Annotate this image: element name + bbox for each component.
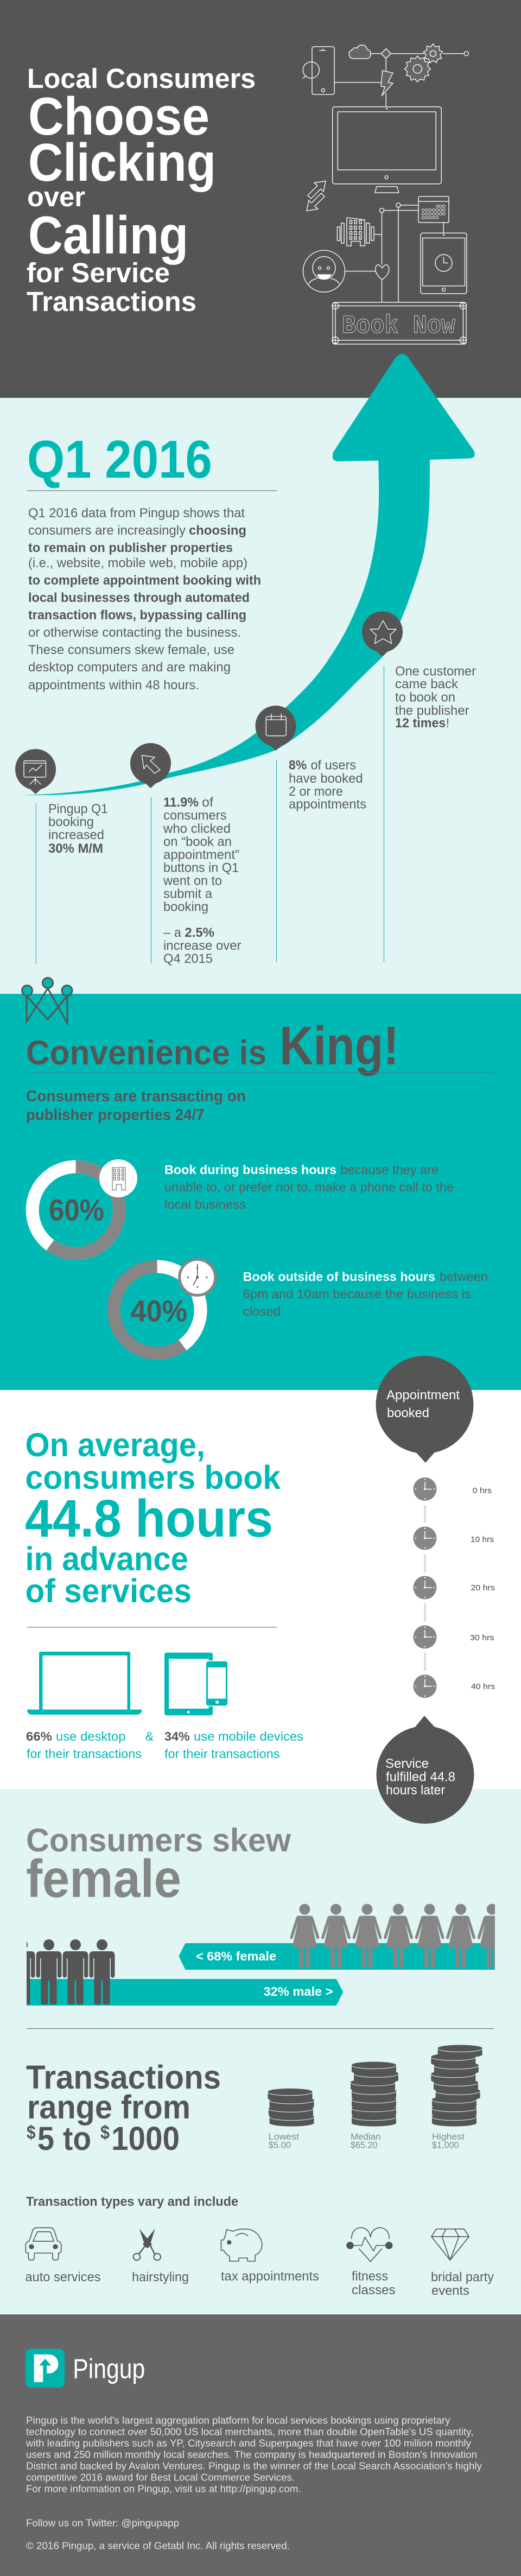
title: Local Consumers xyxy=(27,63,256,94)
chart: highest coin stack: $1,000 xyxy=(432,2140,459,2150)
stat: 11.9% of consumers: appointment” xyxy=(163,848,239,862)
stat: 8% of users: of users xyxy=(310,758,356,773)
chart: median coin stack: Median xyxy=(351,2131,381,2142)
stat: 11.9% of consumers: 11.9% xyxy=(163,795,199,810)
chart: 32% male bar: 32% male > xyxy=(264,1984,333,1998)
icon: smiling face xyxy=(303,250,376,292)
text block: book during business hours: local business xyxy=(164,1197,246,1211)
icon: scissors xyxy=(134,2229,161,2260)
chart: 60% donut xyxy=(33,1159,137,1254)
timeline: hours: 10 hrs xyxy=(471,1535,494,1544)
stat: 11.9% of consumers: went on to xyxy=(163,874,222,889)
label: bridal party events xyxy=(431,2270,494,2298)
marker: chart pin xyxy=(15,749,56,794)
text block: book during business hours: unable to, or prefer not to, make a phone call to the xyxy=(164,1180,454,1194)
stat: one customer 12 times: ! xyxy=(446,716,449,731)
marker: cursor pin xyxy=(130,743,171,788)
icon: piggy bank xyxy=(221,2229,262,2261)
chart: median coin stack xyxy=(351,2062,398,2150)
heading: transactions range: 1000 xyxy=(111,2120,180,2157)
text block: about Pingup: For more information on Pingup, visit us at http://pingup.com. xyxy=(26,2483,301,2494)
stat: one customer 12 times: came back xyxy=(395,677,459,691)
icon: cloud, diamond, gears xyxy=(349,42,468,82)
heading: on average 44.8 hours xyxy=(25,1426,281,1609)
stat: 11.9% of consumers: on “book an xyxy=(163,835,232,849)
text block: book during business hours: Book during business hours xyxy=(164,1163,336,1177)
timeline: hours: 0 hrs xyxy=(473,1486,492,1495)
heading: Convenience is King!: King! xyxy=(279,1016,399,1076)
timeline: hours xyxy=(414,1477,495,1698)
text block: about Pingup: with leading publishers such as YP, Citysearch and Superpages that have over 100 million monthly xyxy=(26,2438,471,2449)
text: ampersand: & xyxy=(145,1729,154,1743)
icon: laptop xyxy=(27,1652,142,1715)
icon: phone with magnifier xyxy=(303,47,381,94)
stat: one customer 12 times: the publisher xyxy=(395,703,469,718)
text block: Q1 intro paragraph: to remain on publisher properties xyxy=(28,541,233,555)
title: Calling xyxy=(28,205,188,265)
heading: consumers skew female xyxy=(26,1822,291,1908)
stat: 8% of users: 8% xyxy=(289,758,307,773)
title: Choose xyxy=(28,86,209,146)
icon: connector lines and calendar xyxy=(374,196,449,302)
heading: on average 44.8 hours: consumers book xyxy=(25,1459,281,1496)
heading: transactions range: to xyxy=(63,2120,91,2157)
stat: bookings increased: booking xyxy=(48,815,94,829)
title: over xyxy=(27,181,85,212)
text block: about Pingup: Pingup is the world's largest aggregation platform for local services bookings using proprietary xyxy=(26,2415,450,2426)
icon: diamond xyxy=(431,2229,469,2260)
panel: light demographics background xyxy=(0,1789,521,2314)
stat: 34% mobile: use mobile devices xyxy=(194,1729,303,1743)
label: auto services: auto services xyxy=(25,2270,101,2285)
heading: transactions range: $ xyxy=(100,2122,110,2143)
stat: 66% desktop xyxy=(26,1729,142,1761)
icon: office building xyxy=(337,218,374,246)
timeline: hours: 40 hrs xyxy=(471,1682,495,1691)
label: hairstyling: hairstyling xyxy=(132,2270,189,2285)
subheading: transaction types: Transaction types vary and include xyxy=(26,2194,238,2209)
text block: book outside business hours xyxy=(219,1270,488,1318)
icon: clock badge xyxy=(180,1259,215,1295)
panel: white booking-lead background xyxy=(0,1390,521,1789)
stat: one customer 12 times: One customer xyxy=(395,664,476,678)
text block: Q1 intro paragraph: local businesses through automated xyxy=(28,591,250,605)
text block: Q1 intro paragraph: consumers are increasingly xyxy=(28,523,186,538)
timeline: hours: 20 hrs xyxy=(471,1583,495,1592)
stat: bookings increased xyxy=(36,802,108,964)
stat: 34% mobile: 34% xyxy=(164,1729,190,1743)
stat: 8% of users: appointments xyxy=(289,797,366,812)
stat: 8% of users xyxy=(276,758,366,962)
label: fitness classes: fitness xyxy=(352,2269,388,2284)
label: bridal party events: bridal party xyxy=(431,2270,494,2285)
text block: book outside business hours: between xyxy=(440,1270,488,1284)
icon: lightning bolt xyxy=(381,59,393,106)
stat: 8% of users: have booked xyxy=(289,771,363,786)
heading: transactions range: Transactions xyxy=(26,2059,221,2096)
text block: Q1 intro paragraph: These consumers skew female, use xyxy=(28,643,234,657)
panel: footer background xyxy=(0,2314,521,2576)
icon: desktop monitor xyxy=(333,107,441,193)
icon: crown xyxy=(22,978,72,1023)
panel: dark header background xyxy=(0,0,521,398)
heading: on average 44.8 hours: On average, xyxy=(25,1426,205,1463)
stat: 11.9% of consumers: of xyxy=(202,795,213,810)
chart: 40% donut xyxy=(114,1259,215,1354)
heading: on average 44.8 hours: in advance xyxy=(25,1540,188,1577)
heading: on average 44.8 hours: of services xyxy=(25,1572,192,1609)
chart: 60% donut: 60% xyxy=(49,1193,104,1227)
text block: Q1 intro paragraph: Q1 2016 data from Pingup shows that xyxy=(28,506,245,521)
icon: tablet and phone xyxy=(164,1653,228,1715)
heading: Convenience is King!: Convenience is xyxy=(26,1034,266,1072)
text block: Q1 intro paragraph: to complete appointment booking with xyxy=(28,573,261,588)
icon: heart with pulse xyxy=(347,2228,392,2262)
stat: 11.9% of consumers xyxy=(151,795,241,966)
text block: about Pingup: users and 250 million monthly local searches. The company is headquartered in Boston's Innovation xyxy=(26,2449,477,2460)
callout: appointment booked: booked xyxy=(387,1406,429,1420)
stat: 34% mobile xyxy=(164,1729,303,1761)
logo: Pingup xyxy=(26,2349,145,2388)
icon: tablet with clock xyxy=(421,233,467,294)
chart: 40% donut: 40% xyxy=(131,1294,187,1328)
text block: Q1 intro paragraph: or otherwise contacting the business. xyxy=(28,625,241,640)
icon: sync arrows xyxy=(307,181,326,211)
heading: transactions range xyxy=(26,2059,221,2157)
stat: 11.9% of consumers: submit a xyxy=(163,887,213,902)
subheading: transacting 24/7 xyxy=(26,1088,246,1124)
chart: 68% female bar: < 68% female xyxy=(196,1949,276,1963)
chart: 68% female bar xyxy=(179,1904,506,1970)
stat: one customer 12 times: to book on xyxy=(395,690,455,705)
subheading: transacting 24/7: Consumers are transacting on xyxy=(26,1088,246,1105)
text block: book outside business hours: closed xyxy=(243,1304,281,1318)
icon: heart xyxy=(376,265,389,280)
heading: on average 44.8 hours: 44.8 hours xyxy=(25,1489,273,1548)
text block: book during business hours xyxy=(140,1163,454,1211)
callout: service fulfilled xyxy=(377,1716,474,1824)
text block: Q1 intro paragraph: desktop computers and are making xyxy=(28,660,231,675)
stat: 11.9% of consumers: consumers xyxy=(163,808,227,823)
timeline: hours: 30 hrs xyxy=(470,1633,494,1642)
heading: transactions range: range from xyxy=(27,2089,190,2125)
heading: transactions range: 5 xyxy=(37,2120,54,2157)
chart: lowest coin stack xyxy=(268,2089,314,2150)
text block: book outside business hours: Book outside of business hours xyxy=(243,1270,435,1284)
text block: Q1 intro paragraph: choosing xyxy=(189,523,246,538)
heading: Convenience is King! xyxy=(26,1016,399,1076)
stat: 11.9% of consumers: buttons in Q1 xyxy=(163,861,239,875)
stat: 66% desktop: for their transactions xyxy=(27,1747,142,1761)
heading: consumers skew female: female xyxy=(26,1849,181,1908)
callout: appointment booked: Appointment xyxy=(386,1388,460,1403)
text block: Q1 intro paragraph xyxy=(28,506,261,693)
text block: about Pingup xyxy=(26,2415,482,2494)
stat: 34% mobile: for their transactions xyxy=(164,1747,280,1761)
title: for Service xyxy=(27,257,170,288)
label: fitness classes: classes xyxy=(352,2283,396,2298)
stat: 11.9% of consumers: Q4 2015 xyxy=(163,951,213,966)
text block: Q1 intro paragraph: appointments within 48 hours. xyxy=(28,678,199,693)
text block: about Pingup: competitive 2016 award for Best Local Commerce Services. xyxy=(26,2472,295,2483)
stat: one customer 12 times: 12 times xyxy=(395,716,446,731)
subheading: transacting 24/7: publisher properties 24/7 xyxy=(26,1107,204,1124)
callout: service fulfilled: Service xyxy=(385,1756,429,1771)
text: twitter: Follow us on Twitter: @pingupapp xyxy=(26,2517,179,2528)
icon: Book Now sign: Book Now xyxy=(342,312,455,341)
stat: 11.9% of consumers: booking xyxy=(163,900,208,914)
title: Transactions xyxy=(27,286,196,317)
stat: 66% desktop: 66% xyxy=(26,1729,52,1743)
panel: light Q1 background xyxy=(0,398,521,994)
stat: bookings increased: increased xyxy=(48,828,104,842)
text block: about Pingup: technology to connect over 50,000 US local merchants, more than double OpenTable's US quantity, xyxy=(26,2427,473,2438)
panel: teal convenience background xyxy=(0,994,521,1390)
icon: Book Now sign xyxy=(332,302,467,344)
title xyxy=(27,63,256,317)
label: tax appointments: tax appointments xyxy=(221,2269,319,2284)
stat: bookings increased: Pingup Q1 xyxy=(48,802,108,816)
stat: 66% desktop: use desktop xyxy=(56,1729,125,1743)
icon: building badge xyxy=(99,1159,137,1197)
chart: highest coin stack xyxy=(431,2045,482,2150)
illustration: devices network xyxy=(303,42,468,344)
stat: 11.9% of consumers: – a xyxy=(163,925,182,940)
chart: lowest coin stack: Lowest xyxy=(269,2131,299,2142)
stat: one customer 12 times xyxy=(384,664,476,962)
label: bridal party events: events xyxy=(431,2283,469,2298)
title: Clicking xyxy=(28,132,216,192)
arrow: growth curve xyxy=(23,354,475,795)
callout: service fulfilled: fulfilled 44.8 xyxy=(386,1769,455,1785)
chart: highest coin stack: Highest xyxy=(432,2131,465,2142)
stat: 8% of users: 2 or more xyxy=(289,784,343,799)
heading: Q1 2016: Q1 2016 xyxy=(27,429,212,489)
callout: service fulfilled: hours later xyxy=(386,1783,445,1798)
stat: 11.9% of consumers: increase over xyxy=(163,938,241,953)
text block: Q1 intro paragraph: transaction flows, bypassing calling xyxy=(28,608,246,623)
chart: 32% male bar xyxy=(10,1939,343,2006)
marker: calendar pin xyxy=(255,706,296,751)
chart: median coin stack: $65.20 xyxy=(351,2140,378,2150)
callout: appointment booked xyxy=(376,1356,473,1463)
chart: lowest coin stack: $5.00 xyxy=(269,2140,291,2150)
stat: 11.9% of consumers: 2.5% xyxy=(185,925,214,940)
logo: Pingup: Pingup xyxy=(73,2353,145,2384)
text block: book during business hours: because they are xyxy=(341,1163,439,1177)
heading: transactions range: $ xyxy=(27,2122,36,2143)
text block: about Pingup: District and backed by Avalon Ventures. Pingup is the winner of the Local Search Association's highly xyxy=(26,2461,482,2472)
text: copyright: © 2016 Pingup, a service of Getabl Inc. All rights reserved. xyxy=(26,2540,290,2551)
heading: consumers skew female: Consumers skew xyxy=(26,1822,291,1858)
stat: 11.9% of consumers: who clicked xyxy=(163,822,231,836)
icon: car xyxy=(26,2228,61,2260)
stat: bookings increased: 30% M/M xyxy=(48,841,103,856)
marker: star pin xyxy=(362,611,403,657)
text block: book outside business hours: 6pm and 10am because the business is xyxy=(243,1287,471,1301)
label: fitness classes xyxy=(352,2269,396,2298)
text block: Q1 intro paragraph: (i.e., website, mobile web, mobile app) xyxy=(28,556,247,570)
